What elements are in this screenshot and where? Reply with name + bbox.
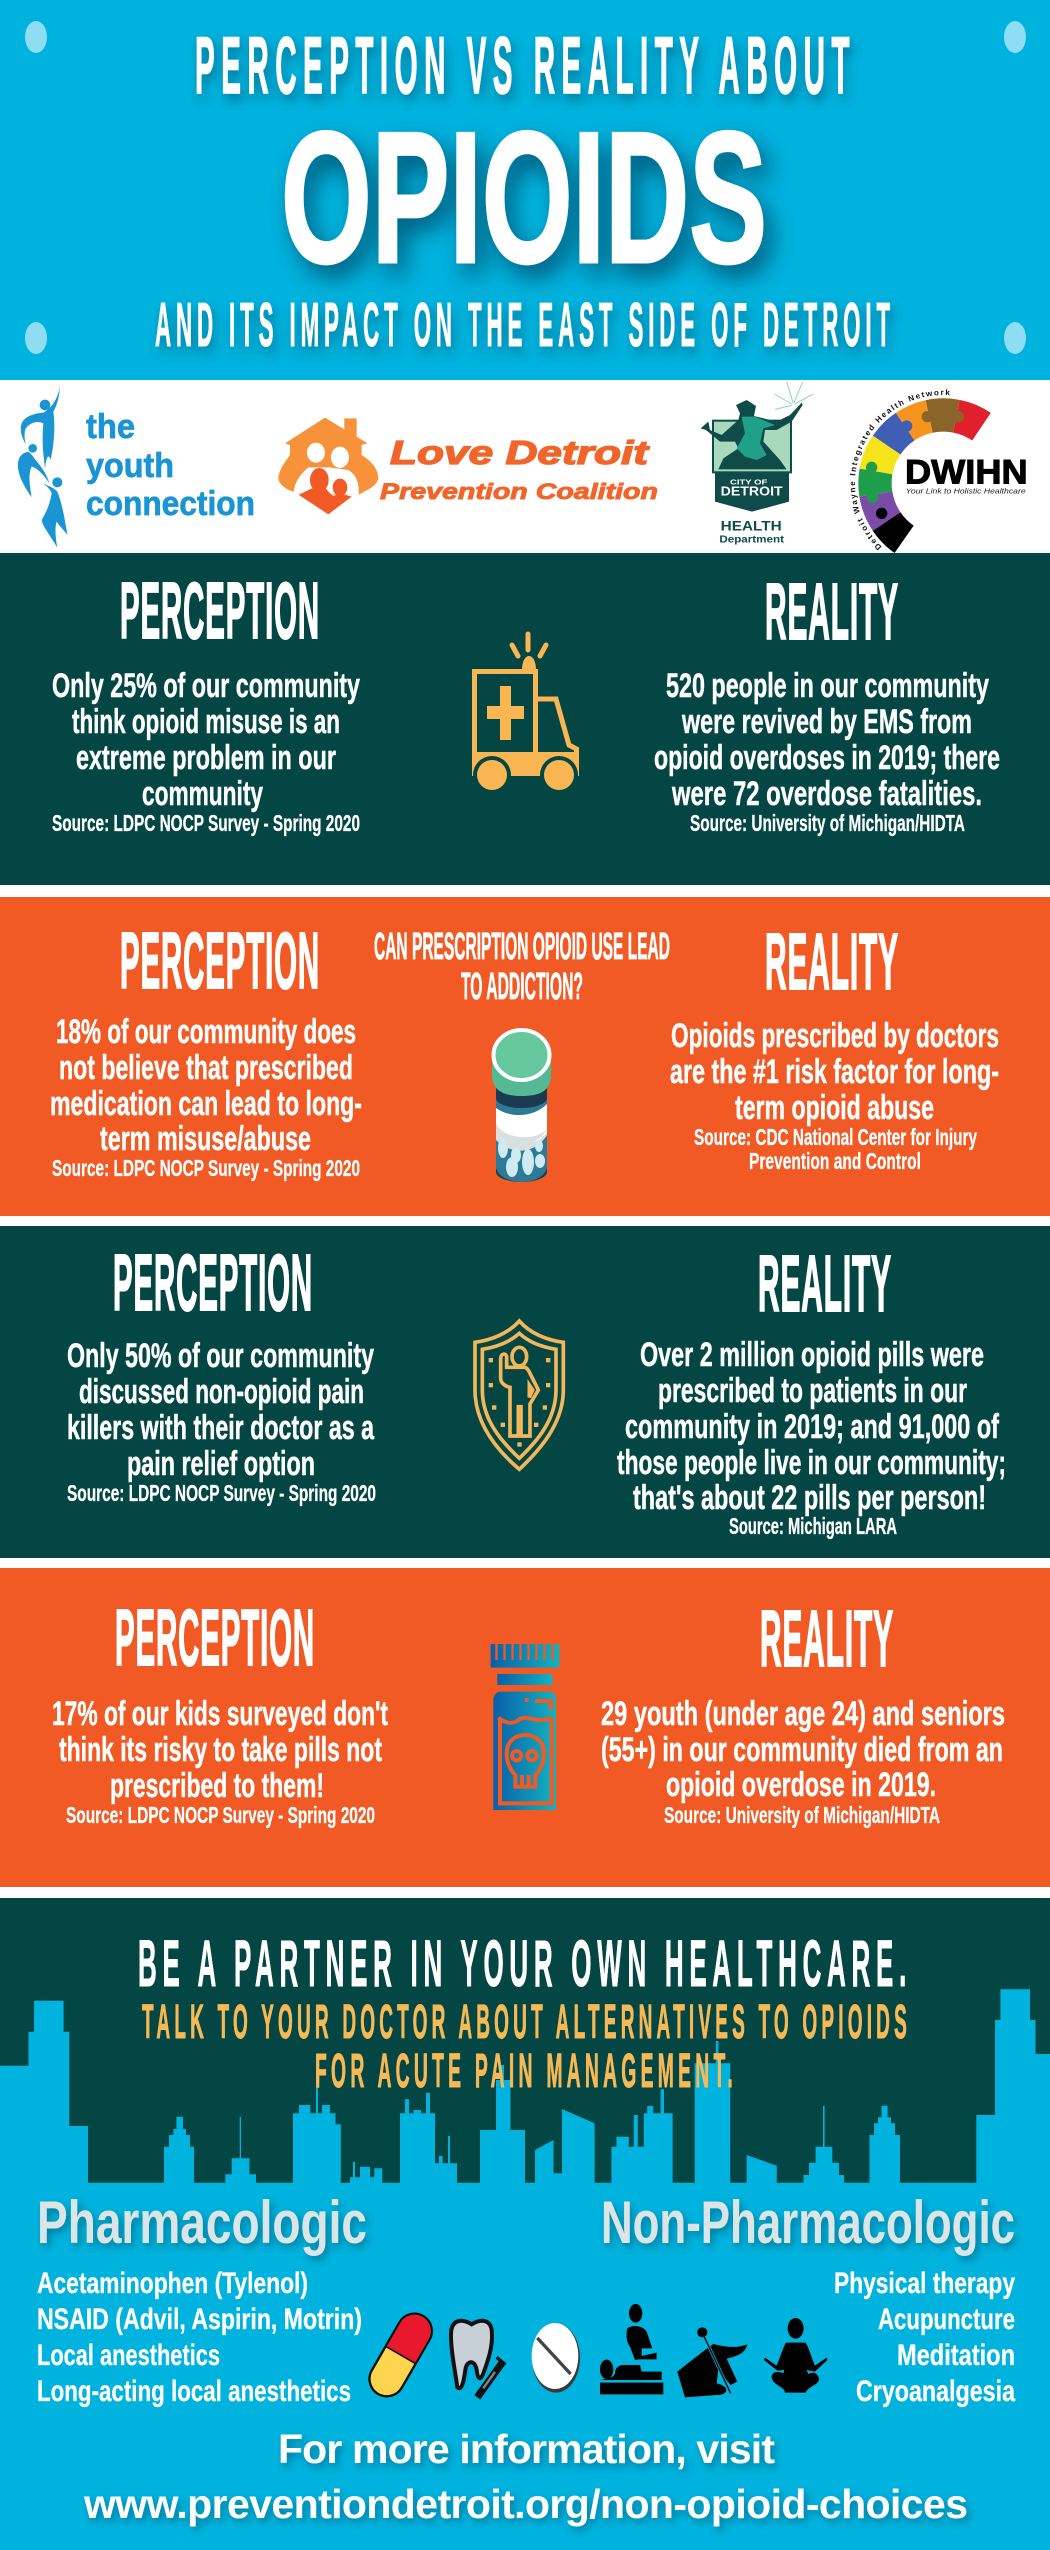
reality text: Source: Michigan LARA (729, 1513, 897, 1539)
perception text: extreme problem in our (76, 739, 336, 777)
logo: dwihn: Your Link to Holistic Healthcare (906, 486, 1026, 495)
reality text (670, 1017, 999, 1174)
list: pharmacologic options (37, 2267, 362, 2408)
logo: city of detroit health department: HEALTH (721, 518, 782, 534)
perception text (50, 1013, 362, 1181)
icon: meditation (764, 2318, 827, 2393)
panel: perception vs reality, non-opioid options: PERCEPTION (113, 1238, 313, 1327)
perception text: community (142, 775, 263, 813)
icon: ambulance (472, 634, 579, 794)
perception text: Source: LDPC NOCP Survey - Spring 2020 (67, 1480, 376, 1506)
perception text: Source: LDPC NOCP Survey - Spring 2020 (52, 1155, 360, 1181)
logo: dwihn (850, 389, 1028, 553)
list: non-pharmacologic options: Meditation (897, 2339, 1015, 2372)
perception text (52, 667, 360, 836)
perception text: Only 25% of our community (52, 667, 360, 705)
logo: the youth connection (18, 385, 255, 548)
reality text: term opioid abuse (735, 1089, 934, 1127)
perception text: discussed non-opioid pain (79, 1373, 364, 1411)
panel: perception vs reality, youth risk (0, 1568, 1050, 1887)
icon: pill bottle (492, 1030, 551, 1182)
perception text: killers with their doctor as a (67, 1409, 375, 1447)
perception text: think opioid misuse is an (72, 703, 340, 741)
list: pharmacologic options: Acetaminophen (Tylenol) (37, 2267, 308, 2300)
panel: perception vs reality, non-opioid options (0, 1226, 1050, 1558)
reality text (617, 1336, 1006, 1539)
panel: partner logos (18, 382, 1028, 553)
logo: the youth connection: the (86, 408, 135, 446)
skyline (0, 1989, 1050, 2550)
question heading: TO ADDICTION? (461, 966, 583, 1008)
perception text: not believe that prescribed (59, 1049, 353, 1087)
logo: city of detroit health department: Department (719, 534, 785, 545)
icon: poison bottle with skull (491, 1644, 559, 1810)
reality text: Prevention and Control (749, 1148, 921, 1174)
panel: perception vs reality, severity: PERCEPTION (120, 566, 320, 655)
list: pharmacologic options: Local anesthetics (37, 2339, 220, 2372)
logo: love detroit prevention coalition (278, 418, 658, 514)
icon: acupuncture (677, 2327, 747, 2397)
heading: pharmacologic: Pharmacologic (37, 2189, 367, 2256)
logo: the youth connection: youth (86, 447, 174, 485)
list: pharmacologic options: Long-acting local anesthetics (37, 2375, 351, 2408)
panel: perception vs reality, youth risk: PERCEPTION (115, 1593, 315, 1682)
call to action subheading (142, 1996, 911, 2098)
panel: header (0, 0, 1050, 380)
logo: love detroit prevention coalition: Love Detroit (390, 434, 651, 471)
perception text: prescribed to them! (110, 1767, 324, 1805)
perception text (52, 1695, 388, 1828)
icon: tablet (532, 2323, 580, 2393)
perception text: medication can lead to long- (50, 1085, 362, 1123)
panel: perception vs reality, addiction (0, 897, 1050, 1216)
panel: perception vs reality, severity (0, 553, 1050, 885)
perception text: pain relief option (127, 1445, 315, 1483)
more information link: www.preventiondetroit.org/non-opioid-choices (83, 2481, 968, 2527)
logo: dwihn: DWIHN (905, 453, 1028, 491)
panel: call to action (0, 1898, 1050, 2550)
more information link (83, 2426, 968, 2527)
logo: dwihn: Detroit Wayne Integrated Health Network (850, 389, 950, 550)
perception text: Only 50% of our community (67, 1337, 374, 1375)
icon: capsule (363, 2307, 438, 2403)
perception text: Source: LDPC NOCP Survey - Spring 2020 (66, 1802, 375, 1828)
panel: perception vs reality, addiction: PERCEPTION (120, 916, 320, 1005)
logo: the youth connection: connection (86, 485, 255, 523)
perception text: 18% of our community does (56, 1013, 356, 1051)
perception text: think its risky to take pills not (59, 1731, 382, 1769)
list: non-pharmacologic options (834, 2267, 1015, 2408)
reality text (601, 1695, 1005, 1828)
perception text: term misuse/abuse (100, 1120, 311, 1158)
list: pharmacologic options: NSAID (Advil, Aspirin, Motrin) (37, 2303, 362, 2336)
perception text: 17% of our kids surveyed don't (52, 1695, 388, 1733)
logo: city of detroit health department (701, 382, 813, 545)
logo: city of detroit health department: CITY OF (730, 478, 768, 487)
more information link: For more information, visit (278, 2426, 775, 2472)
icon: tooth and syringe (451, 2321, 505, 2397)
question heading (374, 926, 670, 1008)
icon: physical therapy (600, 2304, 663, 2394)
logo: love detroit prevention coalition: Prevention Coalition (380, 479, 658, 504)
perception text: Source: LDPC NOCP Survey - Spring 2020 (52, 810, 360, 836)
logo: city of detroit health department: DETROIT (721, 484, 783, 499)
reality text (654, 667, 1000, 836)
perception text (67, 1337, 376, 1506)
icon: shield with person (475, 1321, 563, 1469)
title: opioids: OPIOIDS (281, 93, 767, 302)
